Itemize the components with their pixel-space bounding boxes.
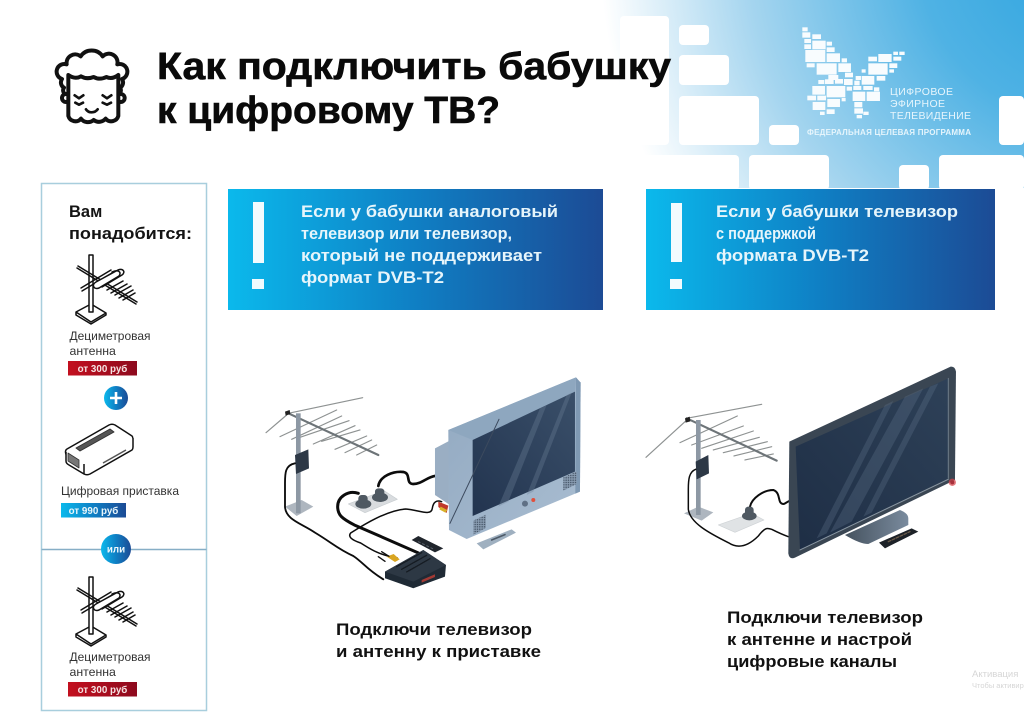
RCA plugs — [438, 502, 448, 513]
caption: digital TV step — [727, 608, 923, 671]
icon: exclamation mark — [252, 202, 264, 289]
banner: DVB-T2 TV — [646, 189, 995, 310]
TV body — [788, 367, 956, 558]
badge: price 300 second — [68, 682, 137, 696]
badge: price 300 second: от 300 руб — [78, 685, 127, 696]
power strip — [718, 513, 764, 532]
caption: analog TV step: и антенну к приставке — [336, 642, 541, 661]
title — [157, 46, 671, 132]
text: DVB-T2 TV condition: формата DVB-T2 — [716, 247, 869, 265]
icon: antenna 2 — [76, 577, 137, 646]
power strip — [348, 491, 397, 513]
icon: plus — [104, 386, 128, 410]
text: antenna 1 label — [70, 329, 150, 358]
text: DVB-T2 TV condition: с поддержкой — [716, 225, 816, 243]
text: analog TV condition: Если у бабушки аналоговый — [301, 203, 558, 221]
antenna — [266, 398, 378, 516]
heading: you will need — [69, 203, 192, 243]
plugs — [355, 488, 388, 509]
text: analog TV condition: формат DVB-T2 — [301, 269, 444, 287]
icon: or: или — [107, 544, 125, 556]
text: set-top box label: Цифровая приставка — [61, 484, 179, 498]
banner: analog TV — [228, 189, 603, 310]
text: antenna 1 label: Дециметровая — [70, 329, 150, 343]
logo: digital TV butterfly: ТЕЛЕВИДЕНИЕ — [890, 110, 971, 122]
icon: grandmother face — [57, 51, 127, 122]
text: DVB-T2 TV condition: Если у бабушки телевизор — [716, 203, 958, 221]
badge: price 990 — [61, 503, 126, 518]
badge: price 300: от 300 руб — [78, 364, 127, 375]
icon: exclamation mark — [670, 203, 682, 289]
illustration: flat TV — [646, 367, 956, 558]
icon: set-top box — [66, 424, 133, 475]
icon: antenna 1 — [76, 255, 137, 324]
badge: price 300 — [68, 361, 137, 376]
cables — [285, 463, 442, 579]
plug — [742, 507, 757, 520]
text: analog TV condition — [301, 203, 558, 287]
cables — [688, 469, 790, 546]
power indicator — [949, 479, 956, 486]
silver remote — [477, 529, 516, 549]
TV body — [435, 441, 449, 504]
header background — [520, 0, 1024, 190]
caption: digital TV step: Подключи телевизор — [727, 608, 923, 627]
panel: what you will need — [42, 184, 206, 710]
text: DVB-T2 TV condition — [716, 203, 958, 265]
logo: digital TV butterfly: ЭФИРНОЕ — [890, 98, 945, 110]
text: antenna 2 label: Дециметровая — [70, 650, 150, 664]
caption: digital TV step: к антенне и настрой — [727, 630, 912, 649]
set-top box remote — [412, 536, 443, 552]
stand — [845, 510, 908, 544]
watermark: Чтобы активир — [972, 681, 1024, 690]
caption: digital TV step: цифровые каналы — [727, 652, 897, 671]
watermark — [972, 669, 1024, 690]
logo: digital TV butterfly: ЦИФРОВОЕ — [890, 86, 953, 98]
badge: price 990: от 990 руб — [69, 506, 118, 517]
text: analog TV condition: который не поддерживает — [301, 247, 542, 265]
caption: analog TV step — [336, 620, 541, 661]
logo: digital TV butterfly — [802, 27, 971, 137]
antenna — [646, 404, 777, 521]
watermark: Активация — [972, 669, 1018, 680]
text: antenna 2 label — [70, 650, 150, 679]
remote — [879, 528, 918, 548]
set-top box — [378, 550, 446, 588]
logo: digital TV butterfly: ФЕДЕРАЛЬНАЯ ЦЕЛЕВАЯ ПРОГРАММА — [807, 128, 971, 137]
heading: you will need: Вам — [69, 203, 102, 221]
title: к цифровому ТВ? — [157, 90, 500, 132]
text: antenna 2 label: антенна — [70, 665, 116, 679]
illustration: CRT TV with set-top box — [266, 377, 581, 588]
title: Как подключить бабушку — [157, 46, 671, 88]
icon: or — [101, 534, 131, 564]
text: antenna 1 label: антенна — [70, 344, 116, 358]
caption: analog TV step: Подключи телевизор — [336, 620, 532, 639]
text: analog TV condition: телевизор или телевизор, — [301, 225, 512, 243]
heading: you will need: понадобится: — [69, 225, 192, 243]
